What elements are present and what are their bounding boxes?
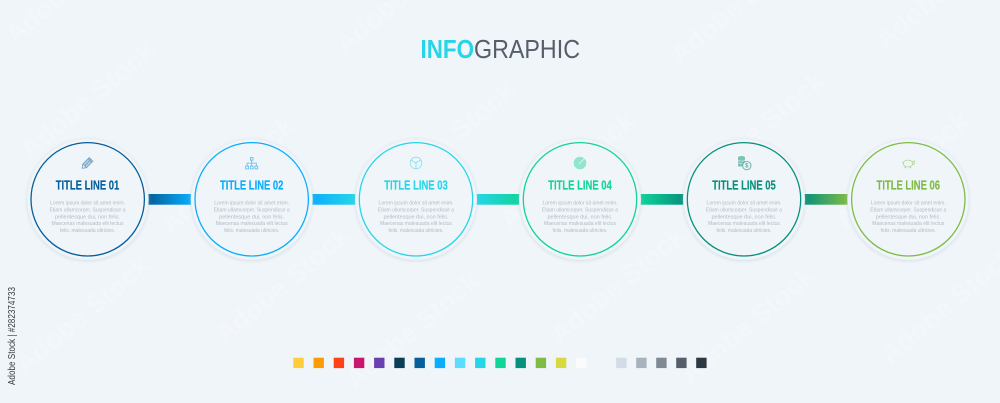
heading: title line 01: TITLE LINE 01	[56, 177, 119, 192]
text: Adobe Stock	[155, 110, 301, 240]
text: Adobe Stock	[10, 250, 156, 380]
body text 01: Lorem ipsum dolor sit amet enim.	[50, 200, 125, 206]
body text 05: felis, malesuada ultricies.	[716, 228, 772, 234]
body text 02: Maecenas malesuada elit lectus	[216, 221, 288, 227]
body text 06: felis, malesuada ultricies.	[881, 228, 936, 234]
text: Adobe Stock	[685, 65, 831, 195]
body text 05: Etiam ullamcorper. Suspendisse a	[706, 207, 782, 213]
body text 05	[706, 200, 782, 234]
body text 01: pellentesque dui, non felis.	[55, 214, 120, 220]
text: Adobe Stock	[15, 35, 161, 165]
heading: title line 03: TITLE LINE 03	[384, 177, 448, 192]
connector bar 2	[312, 194, 356, 205]
body text 02: felis, malesuada ultricies.	[224, 228, 279, 234]
panel: step 02	[191, 139, 312, 260]
body text 01: felis, malesuada ultricies.	[60, 228, 115, 234]
body text 03: Maecenas malesuada elit lectus	[380, 221, 452, 227]
title: INFOGRAPHIC	[420, 34, 580, 64]
connector bar 5	[804, 194, 848, 205]
heading: title line 06: TITLE LINE 06	[877, 177, 940, 192]
panel: step 05	[684, 139, 804, 260]
body text 03: pellentesque dui, non felis.	[384, 214, 448, 220]
panel: step 01	[27, 139, 148, 260]
panel: step 06	[848, 139, 969, 260]
icon: pencil	[80, 158, 93, 170]
body text 04: Lorem ipsum dolor sit amet enim.	[542, 200, 618, 206]
body text 03: felis, malesuada ultricies.	[388, 228, 444, 234]
body text 02: Lorem ipsum dolor sit amet enim.	[214, 200, 289, 206]
icon: piggy bank	[902, 160, 914, 168]
heading: title line 04: TITLE LINE 04	[548, 177, 612, 192]
stock credit: Adobe Stock | #282374733	[6, 287, 18, 385]
body text 02	[214, 200, 290, 234]
body text 01: Maecenas malesuada elit lectus	[52, 221, 124, 227]
heading: title line 05: TITLE LINE 05	[712, 177, 776, 192]
icon: pie chart	[410, 157, 422, 169]
body text 06: pellentesque dui, non felis.	[876, 214, 941, 220]
body text 04: Etiam ullamcorper. Suspendisse a	[542, 207, 618, 213]
icon: coins: $	[745, 164, 749, 170]
connector bar 3	[476, 194, 520, 205]
text: Adobe Stock	[210, 220, 356, 350]
body text 01	[50, 200, 126, 234]
body text 04: pellentesque dui, non felis.	[548, 214, 612, 220]
body text 05: pellentesque dui, non felis.	[712, 214, 776, 220]
body text 06	[870, 200, 946, 234]
body text 02: Etiam ullamcorper. Suspendisse a	[214, 207, 290, 213]
text: Adobe Stock	[375, 75, 521, 205]
body text 06: Maecenas malesuada elit lectus	[872, 221, 945, 227]
connector bar 4	[640, 194, 684, 205]
body text 05: Lorem ipsum dolor sit amet enim.	[706, 200, 782, 206]
connector bar 1	[148, 194, 192, 205]
text: Adobe Stock	[830, 105, 976, 235]
text: Adobe Stock	[495, 105, 641, 235]
body text 03	[378, 200, 454, 234]
body text 05: Maecenas malesuada elit lectus	[708, 221, 780, 227]
panel: step 03	[356, 139, 476, 260]
body text 04: felis, malesuada ultricies.	[552, 228, 608, 234]
body text 02: pellentesque dui, non felis.	[219, 214, 284, 220]
panel: step 04	[520, 139, 640, 260]
icon: org chart	[246, 158, 258, 169]
text: Adobe Stock	[340, 265, 486, 395]
icon: target	[574, 157, 586, 169]
text: Adobe Stock	[675, 260, 821, 390]
body text 01: Etiam ullamcorper. Suspendisse a	[50, 207, 126, 213]
body text 06: Etiam ullamcorper. Suspendisse a	[870, 207, 946, 213]
body text 03: Etiam ullamcorper. Suspendisse a	[378, 207, 454, 213]
body text 04	[542, 200, 618, 234]
body text 06: Lorem ipsum dolor sit amet enim.	[871, 200, 946, 206]
body text 04: Maecenas malesuada elit lectus	[544, 221, 616, 227]
heading: title line 02: TITLE LINE 02	[220, 177, 283, 192]
colour palette swatches	[293, 358, 707, 368]
text: Adobe Stock	[545, 220, 691, 350]
body text 03: Lorem ipsum dolor sit amet enim.	[378, 200, 454, 206]
